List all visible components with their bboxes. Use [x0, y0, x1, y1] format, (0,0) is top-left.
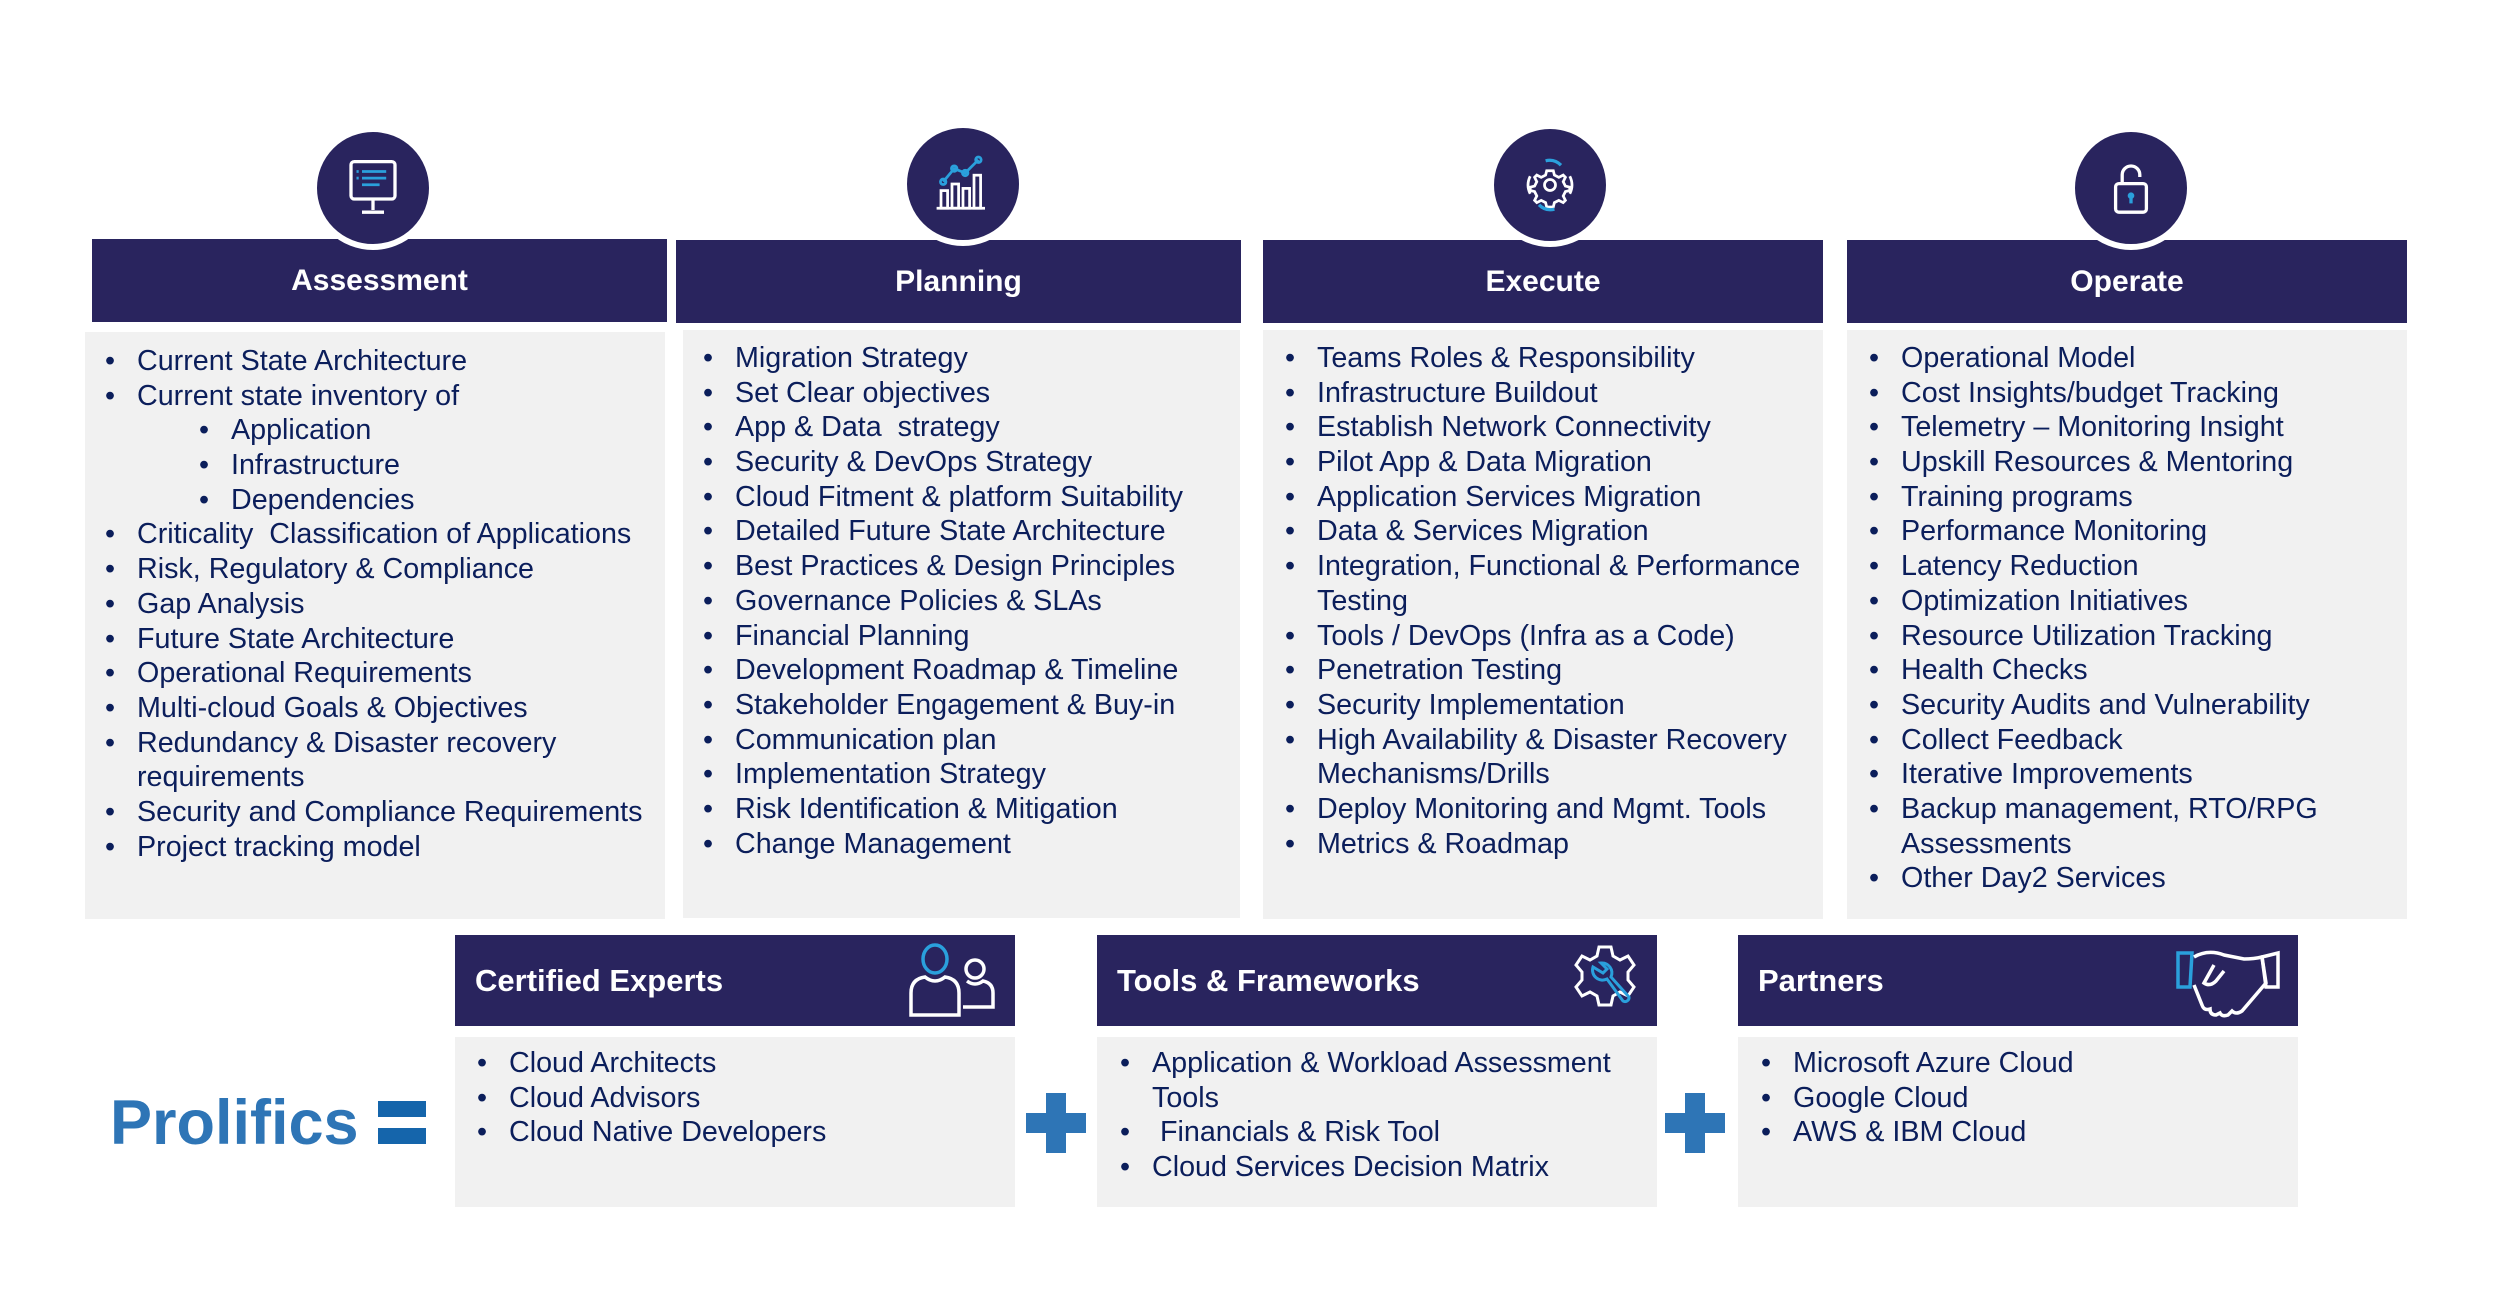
panel: partners — [1738, 935, 2298, 1207]
text: Development Roadmap & Timeline — [735, 654, 1178, 686]
icon: monitor — [311, 126, 435, 250]
text: Redundancy & Disaster recovery — [137, 727, 556, 759]
panel: certified experts — [455, 935, 1015, 1207]
text: Current State Architecture — [137, 345, 467, 377]
text: Detailed Future State Architecture — [735, 515, 1166, 547]
text: Change Management — [735, 828, 1011, 860]
text: Google Cloud — [1793, 1082, 1968, 1114]
text: Cloud Fitment & platform Suitability — [735, 481, 1183, 513]
text: Assessments — [1901, 828, 2072, 860]
panel: execute — [1263, 129, 1823, 919]
text: Resource Utilization Tracking — [1901, 620, 2272, 652]
text: Criticality Classification of Applications — [137, 518, 631, 550]
icon: gear cycle — [1488, 123, 1612, 247]
body: certified experts list — [455, 1037, 1015, 1207]
icon: open lock — [2069, 126, 2193, 250]
text: Telemetry – Monitoring Insight — [1901, 411, 2284, 443]
text: Optimization Initiatives — [1901, 585, 2188, 617]
text: Current state inventory of — [137, 380, 459, 412]
text: Gap Analysis — [137, 588, 304, 620]
text: Penetration Testing — [1317, 654, 1562, 686]
body: planning list — [683, 330, 1240, 918]
text: AWS & IBM Cloud — [1793, 1116, 2026, 1148]
text: Pilot App & Data Migration — [1317, 446, 1652, 478]
text: Risk, Regulatory & Compliance — [137, 553, 534, 585]
header: operate: Operate — [2070, 264, 2184, 298]
header: partners: Partners — [1758, 962, 1884, 998]
header: partners — [1738, 935, 2298, 1026]
text: Cloud Architects — [509, 1047, 716, 1079]
text: Financials & Risk Tool — [1160, 1116, 1440, 1148]
header: planning: Planning — [895, 264, 1022, 298]
panel: planning — [676, 128, 1241, 918]
text: Data & Services Migration — [1317, 515, 1649, 547]
icon: gear wrench — [1574, 946, 1636, 1006]
body: tools list — [1097, 1037, 1657, 1207]
text: Health Checks — [1901, 654, 2088, 686]
header: certified experts: Certified Experts — [475, 962, 723, 998]
icon: plus 2 — [1665, 1093, 1725, 1153]
panel: tools & frameworks — [1097, 935, 1657, 1207]
header: operate — [1847, 240, 2407, 323]
text: Project tracking model — [137, 831, 421, 863]
text: Teams Roles & Responsibility — [1317, 342, 1695, 374]
text: Latency Reduction — [1901, 550, 2139, 582]
text: Best Practices & Design Principles — [735, 550, 1175, 582]
text: App & Data strategy — [735, 411, 1000, 443]
text: Integration, Functional & Performance — [1317, 550, 1800, 582]
text: Establish Network Connectivity — [1317, 411, 1711, 443]
text: Application Services Migration — [1317, 481, 1701, 513]
text: Set Clear objectives — [735, 377, 990, 409]
text: Iterative Improvements — [1901, 758, 2193, 790]
text: Cost Insights/budget Tracking — [1901, 377, 2279, 409]
header: assessment: Assessment — [291, 264, 468, 296]
body: execute list — [1263, 330, 1823, 919]
text: Infrastructure — [231, 449, 400, 481]
panel: assessment — [85, 132, 667, 919]
text: Deploy Monitoring and Mgmt. Tools — [1317, 793, 1766, 825]
body: partners list — [1738, 1037, 2298, 1207]
text: Migration Strategy — [735, 342, 968, 374]
text: Tools — [1152, 1082, 1219, 1114]
body: operate list — [1847, 330, 2407, 919]
text: Testing — [1317, 585, 1408, 617]
text: Governance Policies & SLAs — [735, 585, 1102, 617]
text: Tools / DevOps (Infra as a Code) — [1317, 620, 1735, 652]
icon: chart — [901, 122, 1025, 246]
text: Security & DevOps Strategy — [735, 446, 1092, 478]
text: Metrics & Roadmap — [1317, 828, 1569, 860]
text: Mechanisms/Drills — [1317, 758, 1550, 790]
icon: handshake — [2176, 950, 2280, 1018]
text: Training programs — [1901, 481, 2133, 513]
text: Upskill Resources & Mentoring — [1901, 446, 2293, 478]
text: Security Implementation — [1317, 689, 1625, 721]
body: assessment list — [85, 332, 665, 919]
header: planning — [676, 240, 1241, 323]
text: Operational Model — [1901, 342, 2135, 374]
text: Other Day2 Services — [1901, 862, 2166, 894]
text: Collect Feedback — [1901, 724, 2123, 756]
header: tools: Tools & Frameworks — [1117, 962, 1420, 998]
heading: Prolifics equals: Prolifics — [110, 1088, 359, 1158]
text: Application — [231, 414, 371, 446]
text: Security Audits and Vulnerability — [1901, 689, 2310, 721]
text: Operational Requirements — [137, 657, 472, 689]
text: Risk Identification & Mitigation — [735, 793, 1118, 825]
text: Performance Monitoring — [1901, 515, 2207, 547]
icon: plus 1 — [1026, 1093, 1086, 1153]
header: execute — [1263, 240, 1823, 323]
text: Multi-cloud Goals & Objectives — [137, 692, 528, 724]
text: Dependencies — [231, 484, 414, 516]
text: Backup management, RTO/RPG — [1901, 793, 2318, 825]
text: Security and Compliance Requirements — [137, 796, 642, 828]
text: Infrastructure Buildout — [1317, 377, 1598, 409]
header: tools — [1097, 935, 1657, 1026]
text: requirements — [137, 761, 304, 793]
text: Application & Workload Assessment — [1152, 1047, 1611, 1079]
panel: operate — [1847, 132, 2407, 919]
text: Stakeholder Engagement & Buy-in — [735, 689, 1175, 721]
header: execute: Execute — [1485, 264, 1601, 298]
text: High Availability & Disaster Recovery — [1317, 724, 1787, 756]
text: Cloud Native Developers — [509, 1116, 826, 1148]
text: Implementation Strategy — [735, 758, 1046, 790]
text: Cloud Services Decision Matrix — [1152, 1151, 1549, 1183]
header: assessment — [92, 239, 667, 322]
text: Cloud Advisors — [509, 1082, 700, 1114]
text: Microsoft Azure Cloud — [1793, 1047, 2074, 1079]
text: Financial Planning — [735, 620, 969, 652]
text: Future State Architecture — [137, 622, 454, 654]
header: certified experts — [455, 935, 1015, 1026]
icon: people — [909, 943, 995, 1017]
text: Communication plan — [735, 724, 997, 756]
